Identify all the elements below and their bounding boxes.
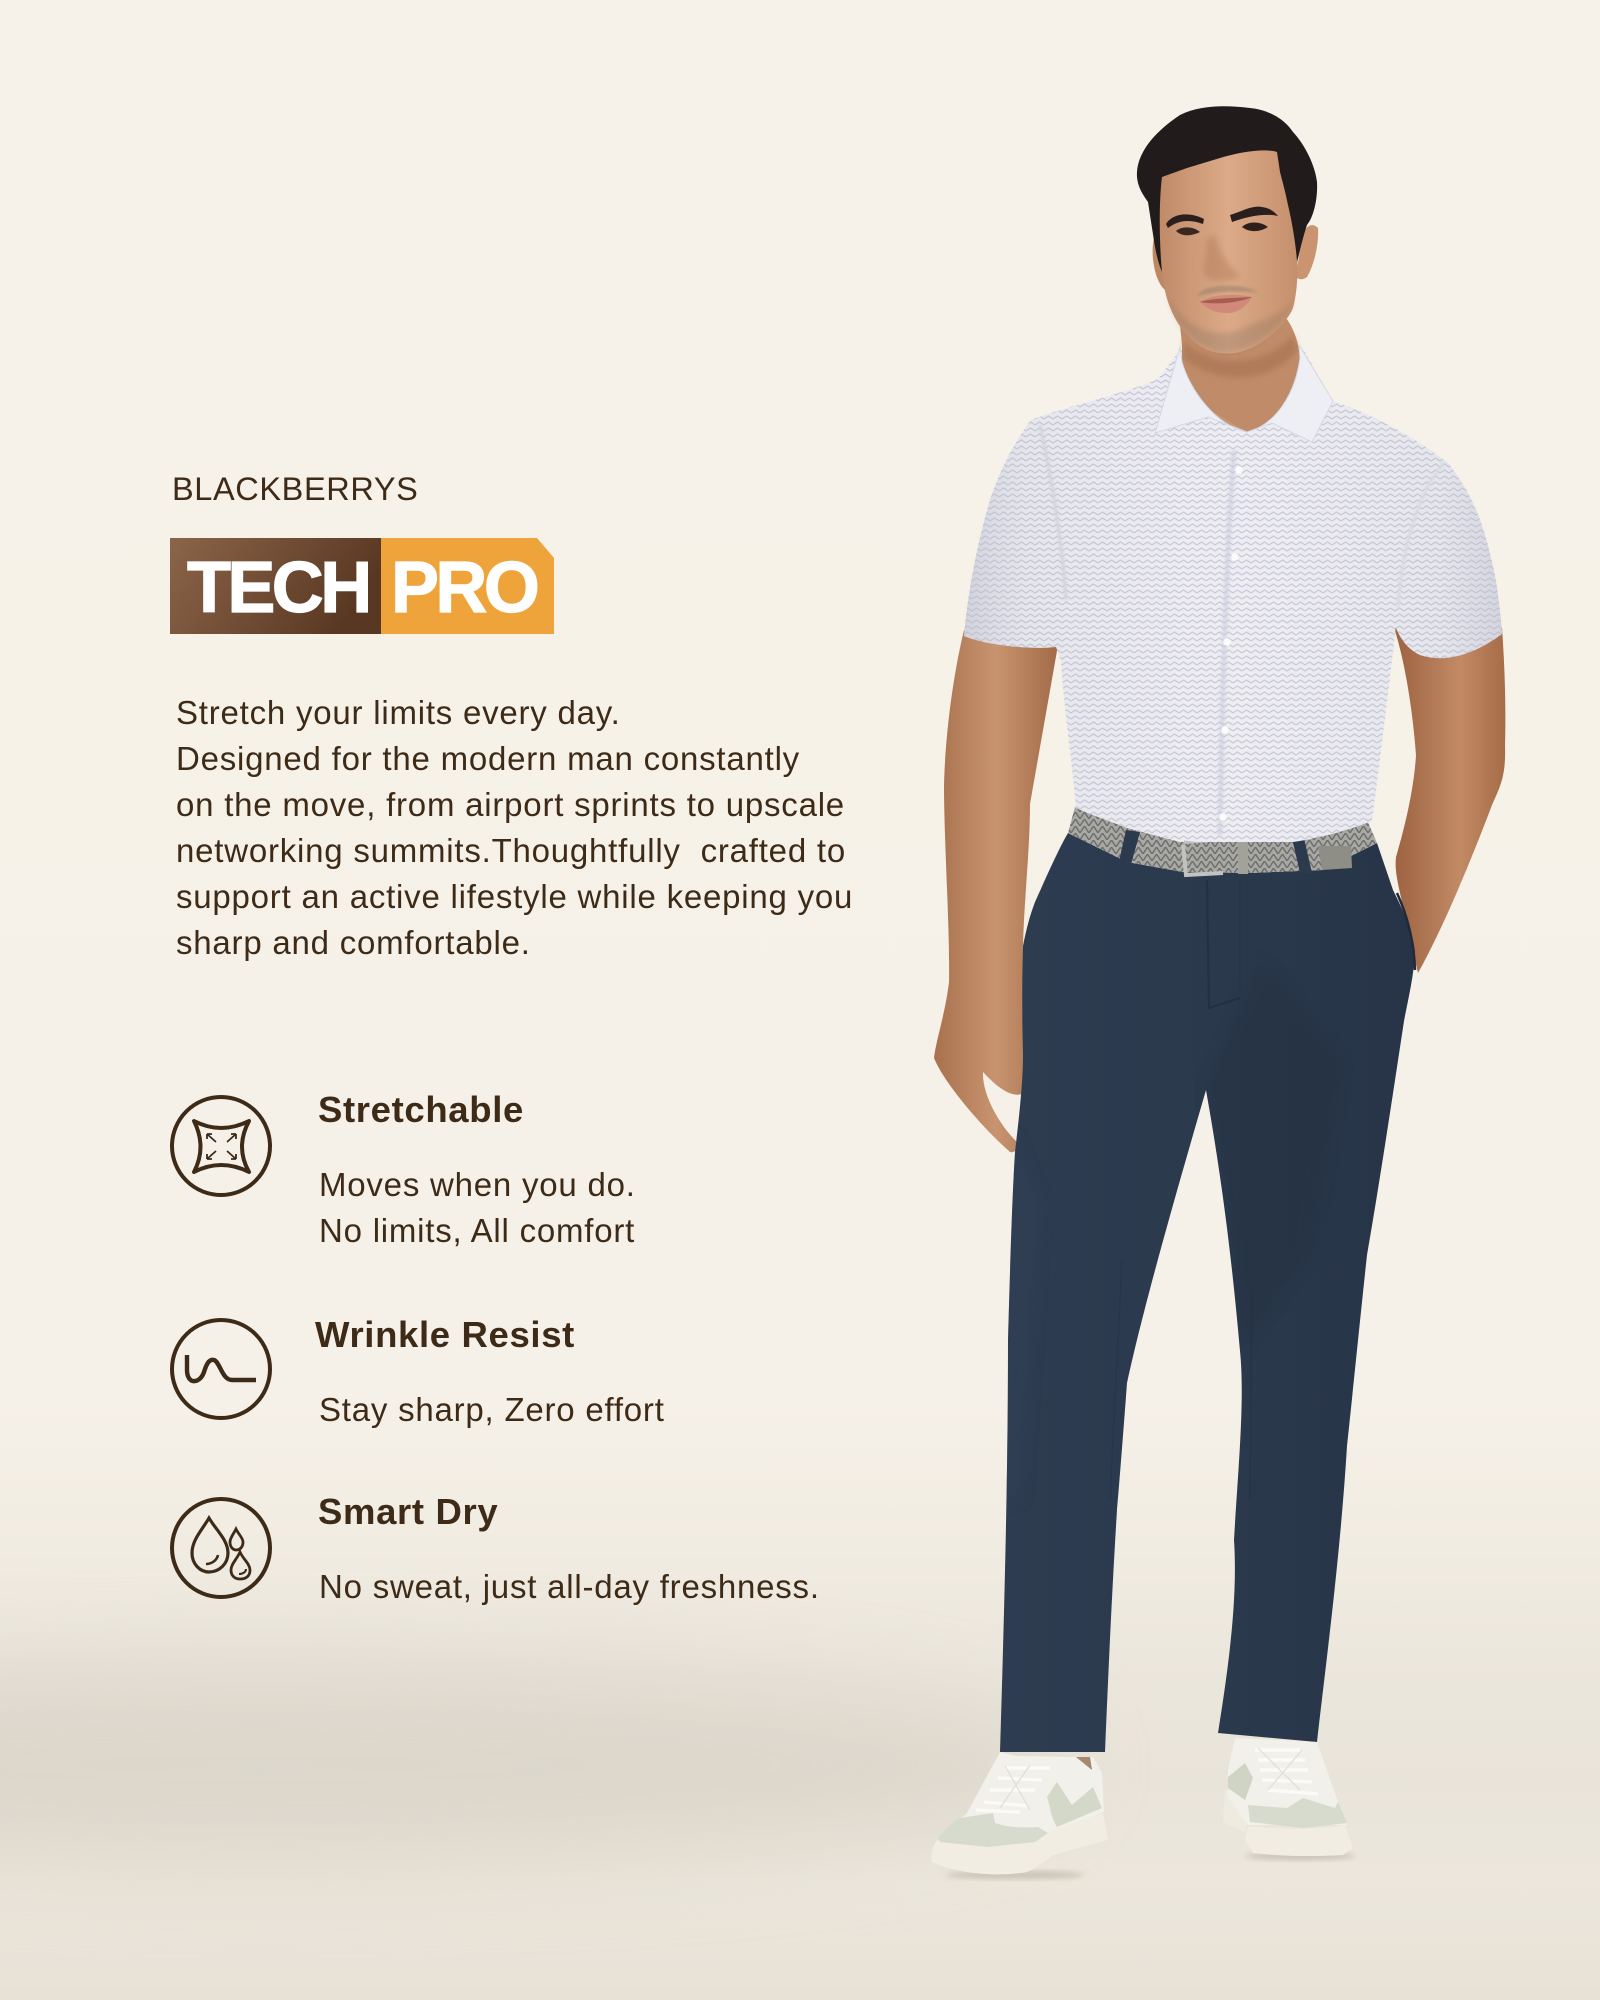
heading: Smart Dry [318,1491,498,1532]
pants [1000,833,1415,1752]
heading: Stretchable [318,1089,524,1130]
collar [1155,345,1333,442]
sage toe cap [1248,1798,1347,1828]
intro paragraph: sharp and comfortable. [176,924,531,961]
intro paragraph: networking summits.Thoughtfully crafted to [176,832,846,869]
shirt buttons [1219,466,1243,821]
intro paragraph [176,694,853,961]
logo: Tech Pro badge: TECH [187,548,369,628]
icon: stretchable [170,1095,272,1197]
nose shadow [1204,236,1240,281]
floor shadow [945,1852,1355,1879]
feature: smart dry [318,1491,820,1605]
left arm [934,630,1058,1152]
intro paragraph: Stretch your limits every day. [176,694,621,731]
description: No sweat, just all-day freshness. [319,1568,820,1605]
shirt shading [964,379,1502,842]
feature: wrinkle resist [315,1314,665,1428]
buckle [1183,839,1223,875]
description [319,1166,636,1249]
intro paragraph: Designed for the modern man constantly [176,740,800,777]
upper [1228,1738,1347,1825]
neck [1180,318,1300,432]
left shoe [931,1752,1108,1874]
logo: Tech Pro badge [170,538,554,634]
pants details [1110,880,1415,1500]
right shoe [1223,1738,1353,1856]
intro paragraph: support an active lifestyle while keeping you [176,878,853,915]
upper [950,1752,1104,1835]
belt [1068,807,1377,875]
belt tip [1318,846,1352,870]
stubble [1168,295,1293,353]
hair [1137,106,1317,272]
feature: stretchable [318,1089,636,1249]
side sage panel [1228,1763,1253,1800]
intro paragraph: on the move, from airport sprints to upscale [176,786,845,823]
icon: wrinkle resist [170,1318,272,1420]
shirt placket and seams [1040,425,1445,835]
logo: Tech Pro badge: PRO [391,548,537,628]
description: No limits, All comfort [319,1212,635,1249]
shirt [964,347,1502,842]
sage heel panel [1047,1782,1102,1827]
sole [1245,1825,1353,1856]
brand name: BLACKBERRYS [172,471,418,507]
facial features [1166,207,1293,353]
right collar leaf [1247,345,1333,442]
face [1159,147,1298,354]
sage toe cap [938,1813,1048,1847]
heading: Wrinkle Resist [315,1314,575,1355]
right arm [1393,625,1505,973]
laces [976,1768,1050,1812]
description: Moves when you do. [319,1166,636,1203]
laces [1255,1750,1318,1794]
neck shadow [1183,335,1298,377]
sole [931,1813,1108,1874]
mustache [1197,286,1258,296]
ears [1153,225,1318,290]
lips [1200,295,1252,313]
eyebrows [1166,214,1204,228]
ankle lining [1076,1757,1092,1770]
description: Stay sharp, Zero effort [319,1391,665,1428]
icon: smart dry [170,1497,272,1599]
belt keeper [1238,838,1248,874]
pants shading [1000,960,1340,1500]
model photo illustration [932,106,1506,1881]
navy belt loops [1118,830,1312,873]
back sole [1223,1790,1250,1832]
eyes [1176,227,1200,235]
left collar leaf [1155,347,1247,433]
